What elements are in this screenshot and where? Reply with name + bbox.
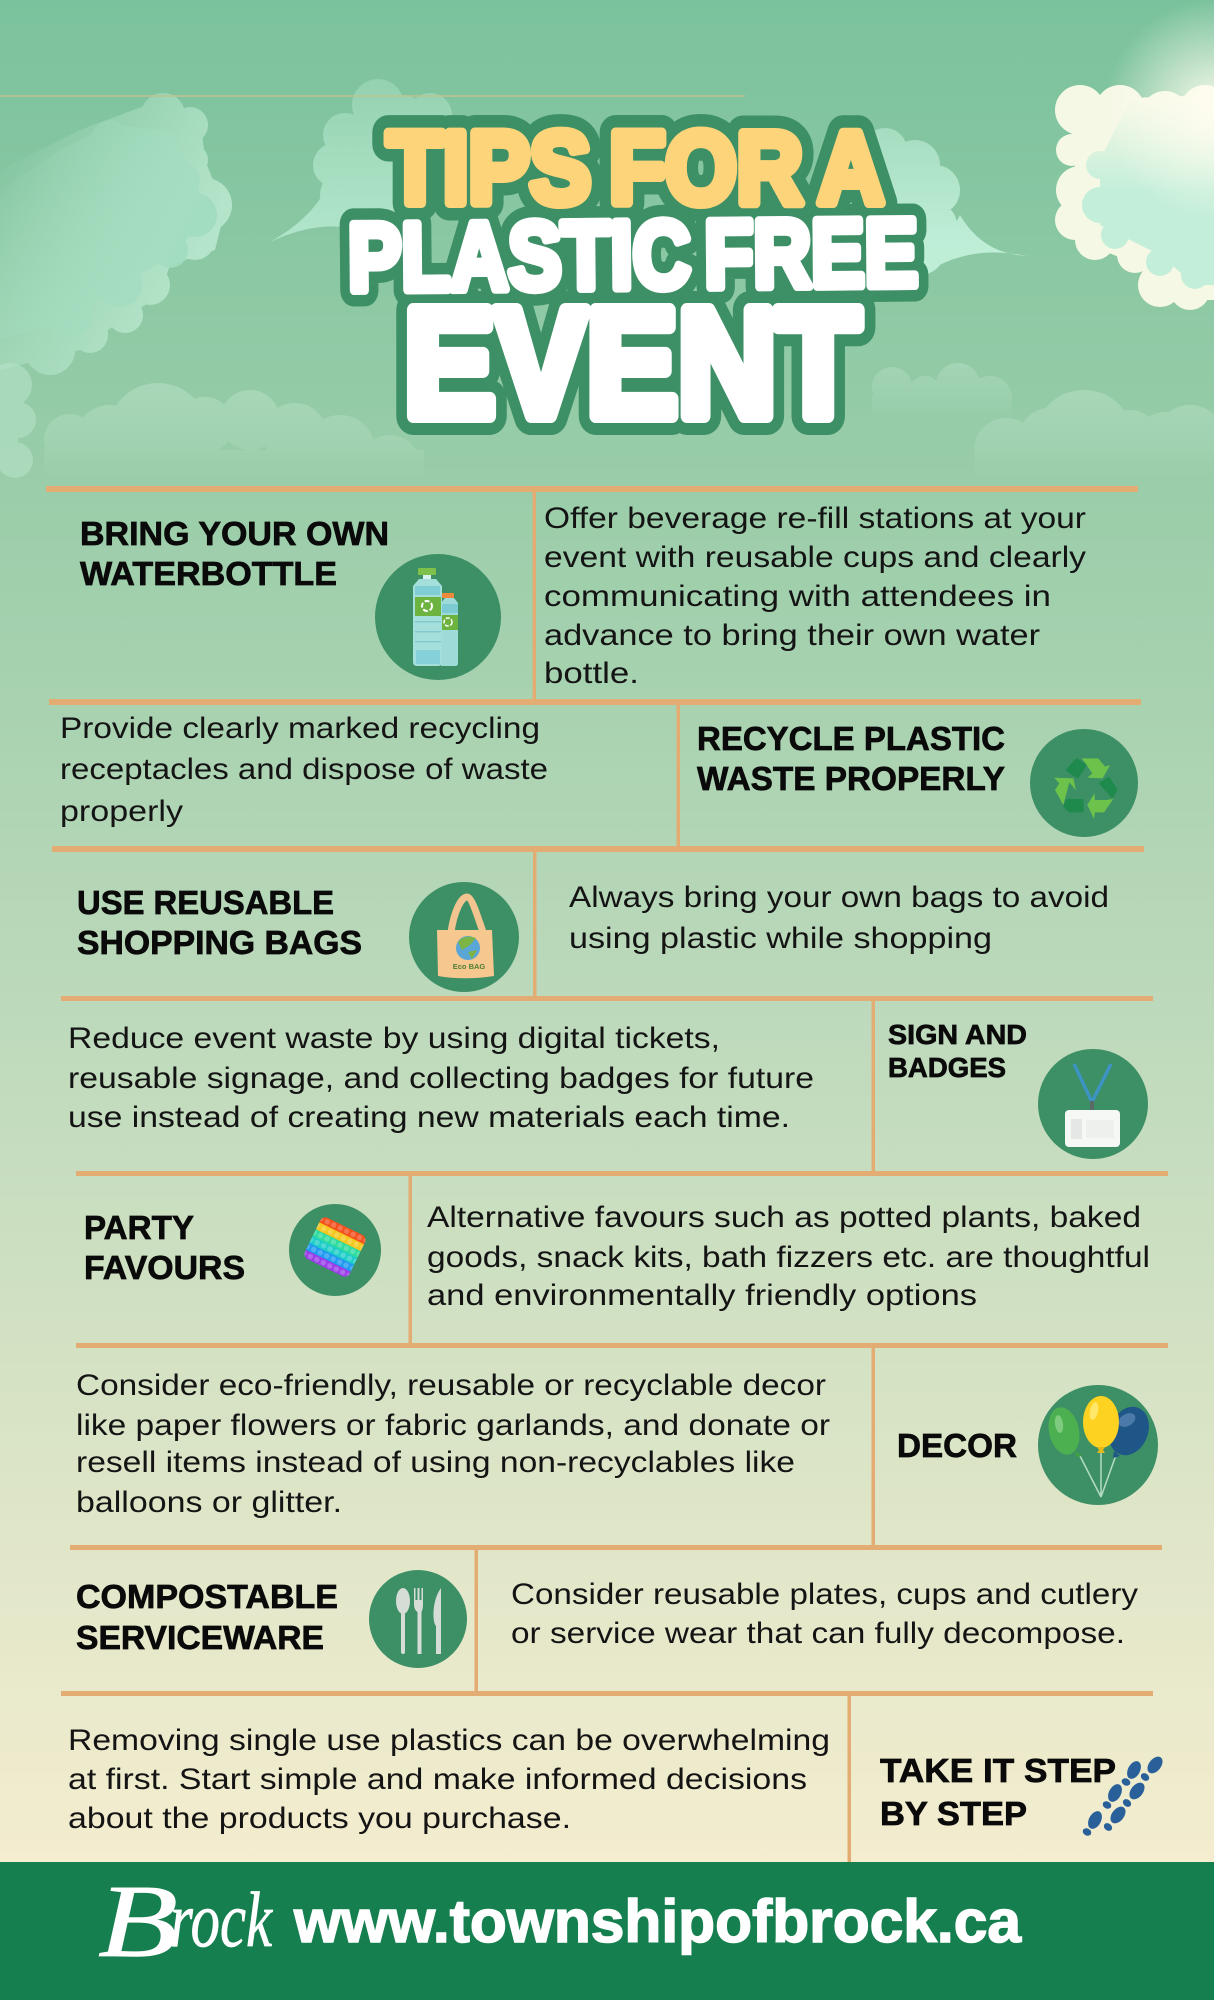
body text: Always bring your own bags to avoid [569, 881, 1109, 914]
cloud: small far left [0, 363, 36, 478]
panel: party favours [84, 1201, 1150, 1312]
cloud: lower right [974, 390, 1214, 448]
icon: lanyard badge [1038, 1049, 1148, 1159]
icon: recycling arrows [1030, 729, 1138, 837]
title: TIPS FOR A [387, 111, 884, 225]
panel: decor [76, 1369, 1158, 1519]
body text: event with reusable cups and clearly [544, 541, 1086, 574]
body text: Removing single use plastics can be overwhelming [68, 1724, 830, 1757]
panel: bring your own waterbottle [80, 502, 1086, 690]
website address: www.townshipofbrock.ca [293, 1888, 1022, 1955]
body text: Provide clearly marked recycling [60, 712, 540, 745]
body text: about the products you purchase. [68, 1802, 571, 1835]
body text [427, 1201, 1150, 1312]
logo: Brock: rock [170, 1876, 273, 1963]
panel: recycle plastic waste properly [60, 712, 1138, 837]
footer band [0, 1862, 1214, 2000]
heading [84, 1210, 245, 1287]
icon: eco tote bag: Eco BAG [453, 962, 485, 971]
heading: SIGN AND [888, 1019, 1027, 1050]
body text: Offer beverage re-fill stations at your [544, 502, 1086, 535]
body text: resell items instead of using non-recyclables like [76, 1446, 795, 1479]
icon: footprints [1081, 1754, 1166, 1837]
cloud: upper left [0, 93, 232, 375]
cloud: behind title, left lobe [270, 79, 452, 242]
title: TIPS FOR A [387, 111, 884, 225]
body text: or service wear that can fully decompose. [511, 1617, 1125, 1650]
heading: FAVOURS [84, 1250, 245, 1287]
body text: advance to bring their own water [544, 619, 1040, 652]
heading [77, 885, 362, 962]
body text: Reduce event waste by using digital tickets, [68, 1022, 720, 1055]
heading: BY STEP [880, 1796, 1027, 1833]
body text: balloons or glitter. [76, 1486, 342, 1519]
body text: goods, snack kits, bath fizzers etc. are thoughtful [427, 1241, 1150, 1274]
accent line [0, 95, 745, 97]
body text [68, 1022, 814, 1134]
body text [569, 881, 1109, 955]
heading: COMPOSTABLE [76, 1579, 338, 1616]
body text [60, 712, 548, 828]
body text: at first. Start simple and make informed decisions [68, 1763, 807, 1796]
heading: PARTY [84, 1210, 194, 1247]
heading [80, 516, 389, 593]
heading: WASTE PROPERLY [697, 761, 1005, 798]
heading: SHOPPING BAGS [77, 925, 362, 962]
logo: Brock: B [98, 1864, 178, 1979]
title: EVENT [404, 277, 860, 449]
title: PLASTIC FREE [348, 199, 918, 311]
heading: USE REUSABLE [77, 885, 334, 922]
panel: sign and badges [68, 1019, 1148, 1159]
panel: use reusable shopping bags [77, 881, 1109, 992]
title: EVENT [404, 277, 860, 449]
body text: using plastic while shopping [569, 922, 992, 955]
body text: Consider eco-friendly, reusable or recyclable decor [76, 1369, 826, 1402]
body text: use instead of creating new materials each time. [68, 1101, 790, 1134]
body text [68, 1724, 830, 1835]
body text [76, 1369, 830, 1519]
body text: communicating with attendees in [544, 580, 1051, 613]
icon: spoon fork and knife [369, 1570, 467, 1668]
body text [511, 1578, 1138, 1650]
icon: balloons [1038, 1385, 1158, 1505]
icon: eco tote bag [409, 882, 519, 992]
body text: receptacles and dispose of waste [60, 753, 548, 786]
heading [697, 721, 1005, 798]
panel: compostable serviceware [76, 1570, 1138, 1668]
cloud: behind title, right lobe [860, 128, 1027, 275]
title [348, 111, 918, 449]
heading [76, 1579, 338, 1657]
body text: and environmentally friendly options [427, 1279, 977, 1312]
heading [880, 1753, 1116, 1833]
title: PLASTIC FREE [348, 199, 918, 311]
panel: take it step by step [68, 1724, 1166, 1837]
heading: DECOR [897, 1428, 1017, 1465]
body text: Consider reusable plates, cups and cutlery [511, 1578, 1138, 1611]
heading: TAKE IT STEP [880, 1753, 1116, 1790]
body text: properly [60, 795, 183, 828]
heading: BRING YOUR OWN [80, 516, 389, 553]
body text: reusable signage, and collecting badges for future [68, 1062, 814, 1095]
logo: Brock [98, 1864, 273, 1979]
body text: bottle. [544, 657, 639, 690]
heading: SERVICEWARE [76, 1620, 324, 1657]
cloud: upper right [1055, 0, 1214, 310]
cloud: lower left [44, 383, 414, 448]
heading: BADGES [888, 1052, 1006, 1083]
icon: water bottles [375, 554, 501, 680]
body text: like paper flowers or fabric garlands, and donate or [76, 1409, 830, 1442]
heading [888, 1019, 1027, 1083]
cloud: lower centre [872, 363, 1012, 396]
body text [544, 502, 1086, 690]
heading: RECYCLE PLASTIC [697, 721, 1005, 758]
heading: WATERBOTTLE [80, 556, 337, 593]
icon: rainbow pop toy [289, 1204, 381, 1296]
body text: Alternative favours such as potted plants, baked [427, 1201, 1141, 1234]
